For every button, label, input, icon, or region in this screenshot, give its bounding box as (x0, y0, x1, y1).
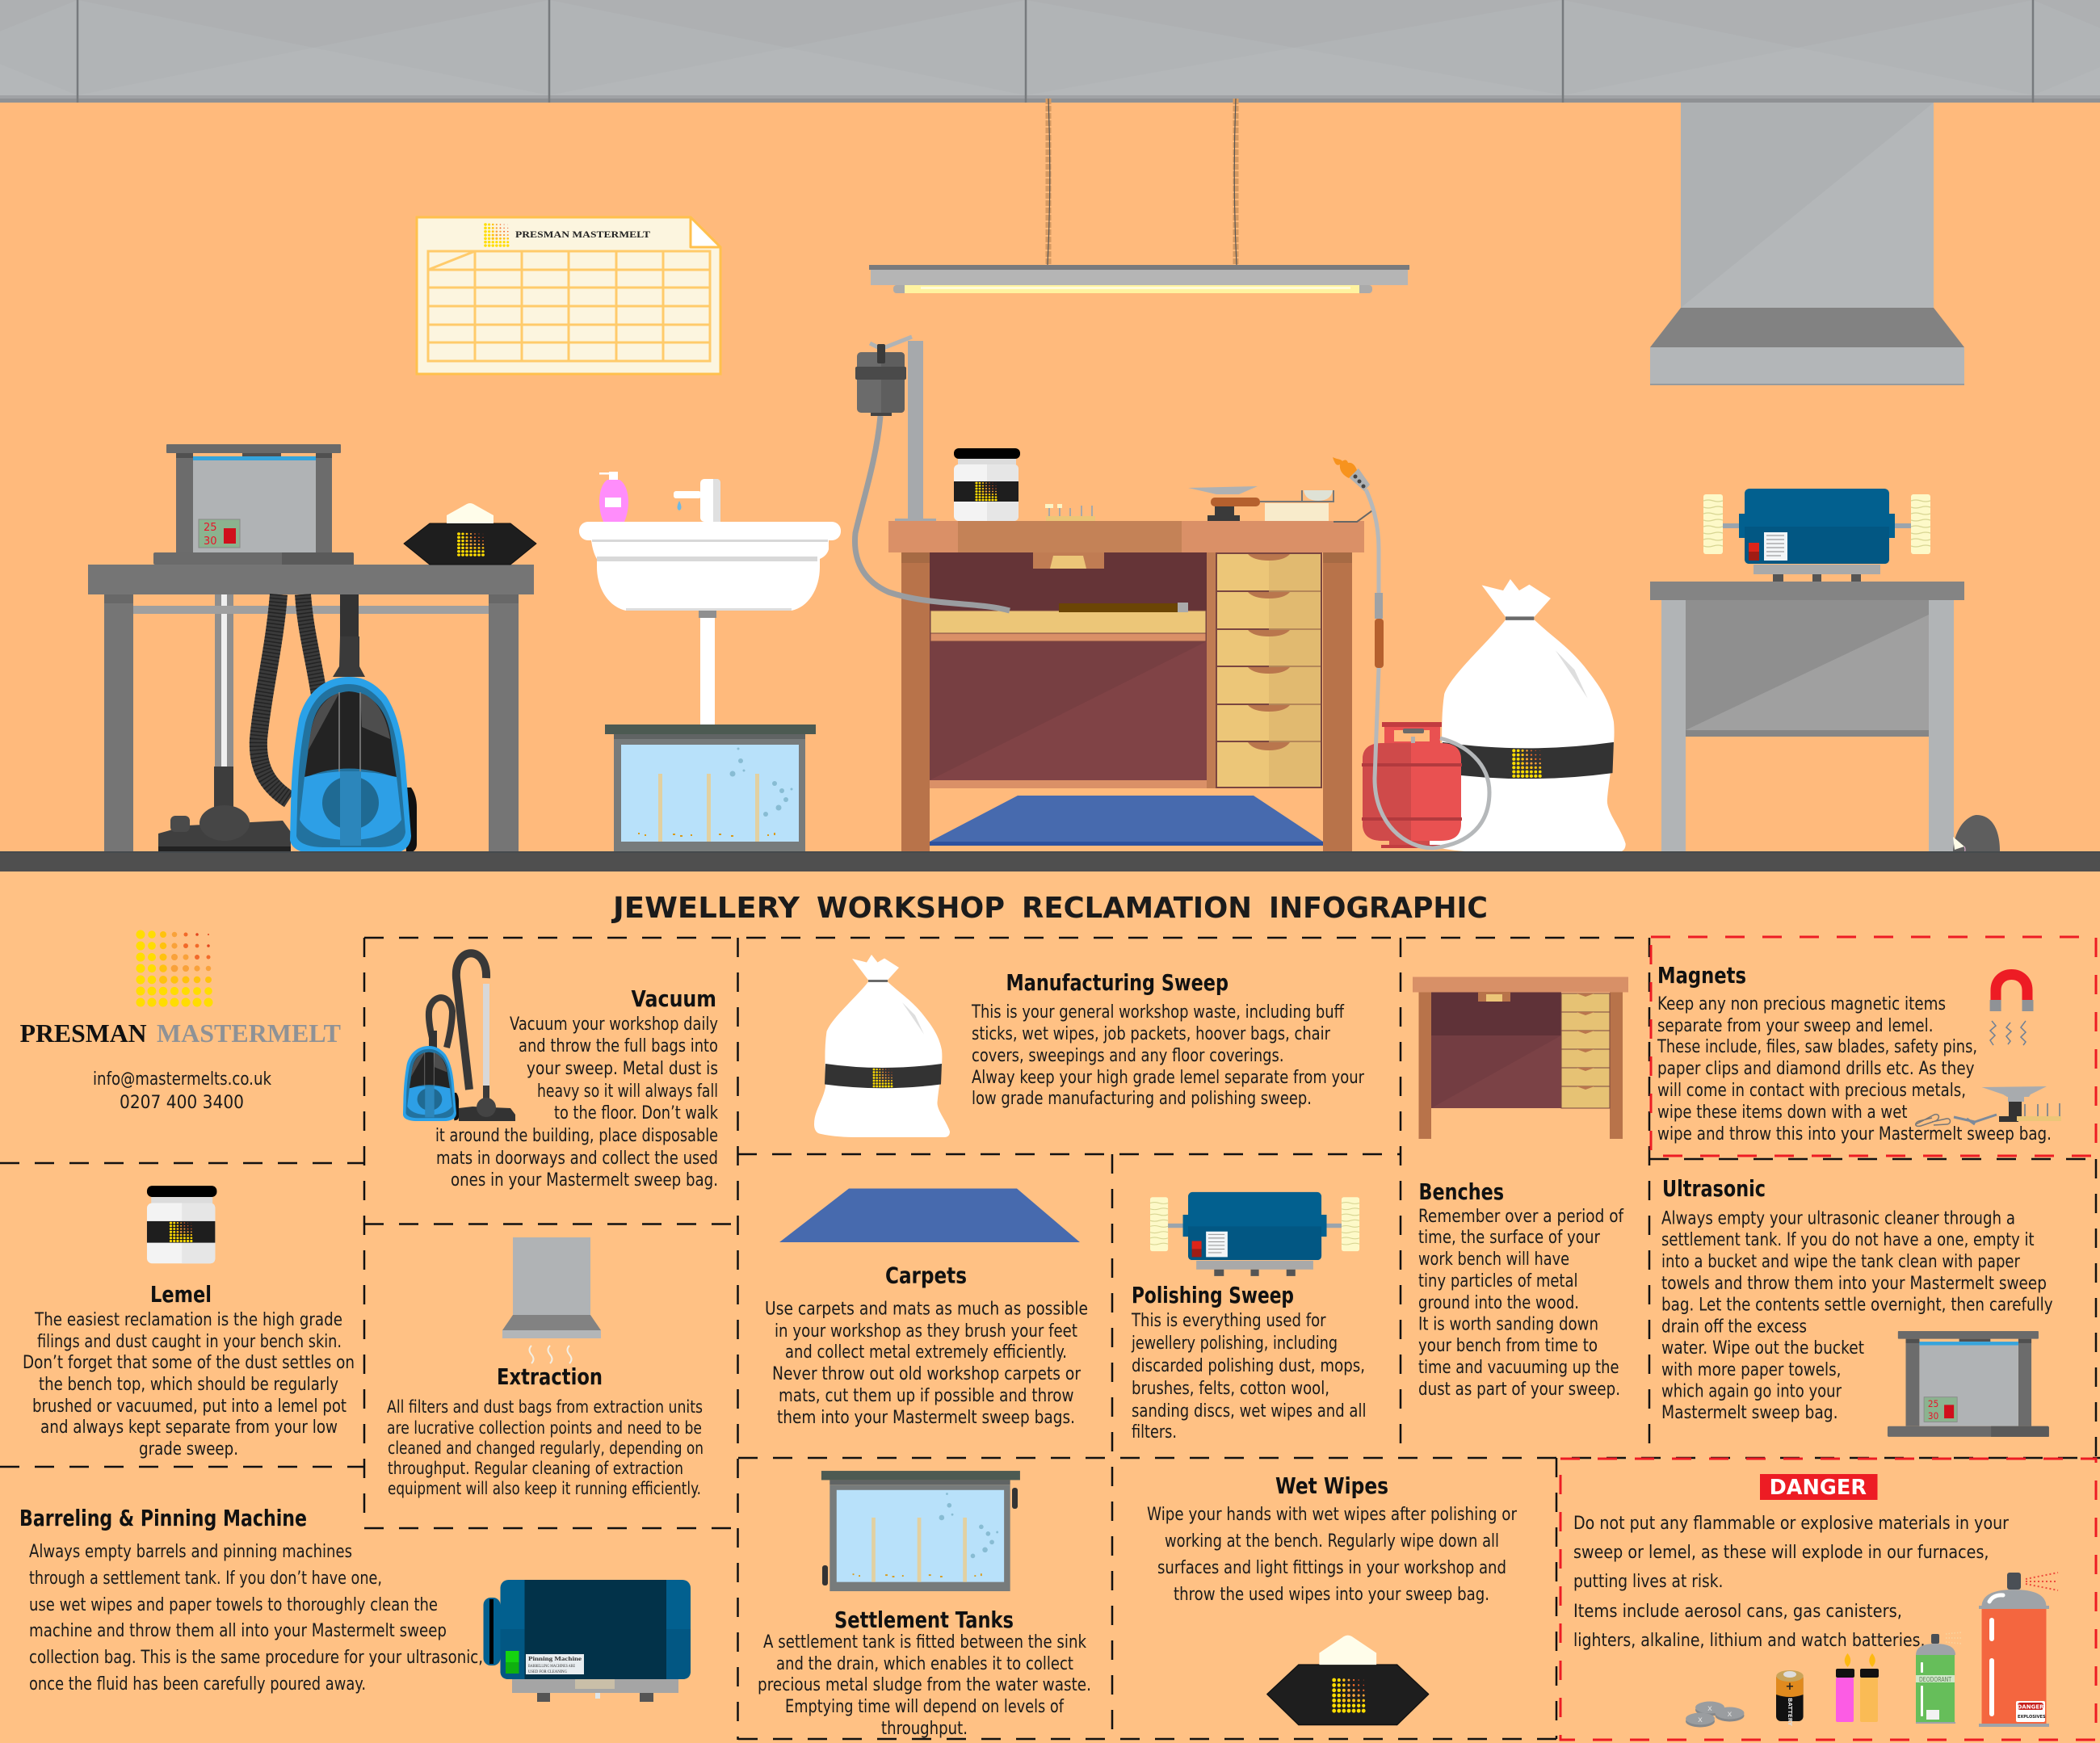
icon: pinning machine: Pinning Machine (528, 1656, 582, 1662)
heading: Lemel (150, 1281, 212, 1308)
body text: dust as part of your sweep. (1418, 1380, 1620, 1400)
body text: to the floor. Don’t walk (554, 1103, 718, 1124)
body text: Always empty your ultrasonic cleaner through a (1661, 1208, 2015, 1229)
body text: paper clips and diamond drills etc. As they (1657, 1059, 1974, 1079)
body text: filings and dust caught in your bench skin. (37, 1332, 342, 1352)
burr stand (1045, 504, 1095, 521)
body text (765, 1300, 1088, 1428)
body text: cleaned and changed regularly, depending on (388, 1438, 704, 1458)
body text: Remember over a period of (1418, 1207, 1624, 1227)
body text: grade sweep. (139, 1439, 238, 1460)
body text: throughput. (881, 1719, 968, 1739)
icon: pinning machine (483, 1580, 691, 1702)
body text (1573, 1514, 2010, 1651)
heading: Extraction (497, 1363, 603, 1390)
panel: barreling and pinning machine (19, 1505, 691, 1702)
body text: sanding discs, wet wipes and all (1132, 1401, 1367, 1422)
body text (1418, 1207, 1624, 1400)
body text: Keep any non precious magnetic items (1657, 994, 1946, 1014)
icon: ultrasonic cleaner (1888, 1331, 2049, 1437)
body text (971, 1002, 1365, 1109)
body text: your bench from time to (1418, 1336, 1598, 1356)
body text: which again go into your (1661, 1381, 1842, 1402)
heading: Wet Wipes (1275, 1472, 1388, 1499)
body text: ground into the wood. (1418, 1293, 1579, 1313)
panel: extraction (387, 1237, 704, 1498)
body text: heavy so it will always fall (537, 1082, 718, 1102)
icon: aerosol can: EXPLOSIVES (2018, 1715, 2046, 1720)
body text: sweep or lemel, as these will explode in our furnaces, (1573, 1543, 1989, 1563)
panel: ultrasonic (1661, 1175, 2053, 1437)
body text: Emptying time will depend on levels of (785, 1697, 1065, 1717)
body text: equipment will also keep it running efficiently. (388, 1479, 701, 1498)
body text: collection bag. This is the same procedure for your ultrasonic, (29, 1648, 483, 1668)
body text (1657, 994, 2052, 1144)
body text: water. Wipe out the bucket (1661, 1338, 1864, 1359)
body text: once the fluid has been carefully poured away. (29, 1674, 366, 1695)
ultrasonic table with vacuum cleaner (88, 444, 536, 857)
body text: All filters and dust bags from extraction units (387, 1397, 703, 1417)
icon: watch batteries (1686, 1701, 1745, 1727)
heading: Benches (1418, 1178, 1504, 1205)
icon: magnetic items (1916, 1086, 2061, 1126)
heading: Settlement Tanks (834, 1606, 1014, 1633)
panel: manufacturing sweep (814, 955, 1365, 1137)
icon: wet wipes box (1267, 1636, 1429, 1725)
body text: Use carpets and mats as much as possible (765, 1300, 1088, 1320)
icon: lighters (1836, 1653, 1879, 1722)
body text: It is worth sanding down (1418, 1315, 1598, 1334)
body text: tiny particles of metal (1418, 1271, 1578, 1292)
danger badge: DANGER (1770, 1476, 1867, 1500)
icon: logo dots (136, 930, 213, 1006)
body text (758, 1632, 1091, 1739)
panel: polishing sweep (1131, 1192, 1367, 1443)
extraction hood (1650, 103, 1964, 385)
body text (23, 1310, 355, 1460)
body text: Wipe your hands with wet wipes after polishing or (1147, 1505, 1518, 1525)
icon: aerosol can: DANGER (2017, 1704, 2044, 1711)
body text: sticks, wet wipes, job packets, hoover bags, chair (972, 1024, 1331, 1044)
icon: extraction hood (502, 1237, 601, 1363)
body text: in your workshop as they brush your feet (775, 1321, 1077, 1342)
body text: Items include aerosol cans, gas canisters, (1573, 1602, 1902, 1622)
icon: aerosol can (1979, 1573, 2058, 1727)
body text: ones in your Mastermelt sweep bag. (451, 1170, 718, 1191)
heading: Ultrasonic (1662, 1175, 1766, 1202)
manufacturing sweep bag on floor (1426, 579, 1626, 852)
panel: vacuum (403, 953, 718, 1191)
panel: wet wipes (1147, 1472, 1518, 1725)
body text (1131, 1311, 1367, 1443)
body text: into a bucket and wipe the tank clean with paper (1661, 1252, 2021, 1272)
icon: watch batteries: x (1698, 1716, 1703, 1724)
main title: JEWELLERY (611, 892, 800, 925)
body text: wipe these items down with a wet (1657, 1102, 1908, 1123)
body text (387, 1397, 704, 1498)
panel: danger (1573, 1474, 2058, 1727)
icon: watch batteries: x (1707, 1704, 1712, 1713)
lower information panel background (0, 872, 2100, 1743)
icon: alkaline battery: + (1786, 1681, 1794, 1693)
icon: deodorant can: DEODORANT (1919, 1676, 1951, 1683)
panel: benches (1413, 977, 1628, 1400)
body text: are lucrative collection points and need to be (387, 1418, 702, 1438)
icon: sweep bag (814, 955, 950, 1137)
body text (435, 1014, 718, 1191)
icon: carpet (779, 1189, 1080, 1242)
body text: filters. (1132, 1422, 1177, 1443)
main title: RECLAMATION (1022, 892, 1252, 925)
icon: magnet (1990, 974, 2034, 1045)
main title: INFOGRAPHIC (1269, 892, 1488, 925)
jeweller's bench (888, 521, 1364, 851)
body text: machine and throw them all into your Mastermelt sweep (29, 1621, 447, 1641)
company name: MASTERMELT (157, 1018, 341, 1048)
red danger frame: danger (1560, 1459, 2096, 1740)
icon: alkaline battery: BATTERY (1787, 1698, 1793, 1727)
body text: Don’t forget that some of the dust settles on (23, 1353, 355, 1373)
gas torch with hose (1333, 457, 1489, 848)
panel: magnets (1657, 962, 2061, 1144)
body text: time, the surface of your (1418, 1228, 1601, 1248)
body text: time and vacuuming up the (1418, 1358, 1619, 1378)
body text: it around the building, place disposable (435, 1126, 718, 1146)
icon: bench (1413, 977, 1628, 1139)
heading: Polishing Sweep (1132, 1282, 1294, 1308)
lemel jar on bench (954, 448, 1020, 521)
icon: pinning machine: USED FOR CLEANING (528, 1670, 567, 1674)
body text: throughput. Regular cleaning of extraction (388, 1459, 683, 1478)
red danger frame: magnets (1651, 937, 2096, 1156)
contact details (93, 1069, 271, 1113)
panel: settlement tanks (758, 1471, 1091, 1739)
hanging strip light (869, 99, 1409, 293)
body text (1147, 1505, 1518, 1605)
body text: working at the bench. Regularly wipe down all (1165, 1531, 1499, 1552)
wall calendar (417, 217, 720, 374)
ceiling (0, 0, 2100, 103)
body text: and collect metal extremely efficiently. (785, 1342, 1067, 1363)
body text: covers, sweepings and any floor coverings. (972, 1046, 1284, 1066)
body text: The easiest reclamation is the high grade (34, 1310, 342, 1330)
body text: Alway keep your high grade lemel separate from your (972, 1068, 1365, 1088)
heading: Magnets (1657, 962, 1746, 989)
panel: lemel (23, 1186, 355, 1460)
body text: These include, files, saw blades, safety pins, (1657, 1037, 1977, 1057)
body text: use wet wipes and paper towels to thoroughly clean the (29, 1595, 438, 1615)
body text: brushes, felts, cotton wool, (1132, 1379, 1329, 1399)
body text: and the drain, which enables it to collect (776, 1654, 1073, 1674)
body text: jewellery polishing, including (1131, 1334, 1338, 1354)
body text: lighters, alkaline, lithium and watch batteries. (1573, 1631, 1926, 1651)
body text: and throw the full bags into (519, 1036, 718, 1056)
body text (1661, 1208, 2053, 1423)
body text: A settlement tank is fitted between the sink (763, 1632, 1086, 1653)
main title: WORKSHOP (817, 892, 1005, 925)
workshop background wall (0, 0, 2100, 872)
icon: watch batteries: x (1728, 1710, 1732, 1719)
icon: alkaline battery (1776, 1670, 1804, 1727)
contact details: 0207 400 3400 (120, 1093, 244, 1113)
icon: pinning machine: BARRELLING MACHINES ARE (528, 1665, 575, 1669)
heading: Vacuum (632, 985, 716, 1012)
body text: brushed or vacuumed, put into a lemel pot (32, 1396, 346, 1417)
icon: lemel jar (147, 1186, 216, 1263)
body text: precious metal sludge from the water waste. (758, 1675, 1091, 1695)
polishing machine on steel table (1650, 489, 1964, 851)
body text: drain off the excess (1661, 1317, 1807, 1338)
pendant motor with flex shaft (855, 337, 1010, 611)
body text: mats in doorways and collect the used (436, 1149, 718, 1169)
body text: them into your Mastermelt sweep bags. (777, 1408, 1075, 1428)
body text (29, 1542, 483, 1695)
workshop floor (0, 851, 2100, 872)
wall calendar: PRESMAN MASTERMELT (515, 229, 650, 240)
heading: Manufacturing Sweep (1006, 969, 1228, 996)
gas canister (1362, 722, 1462, 848)
body text: the bench top, which should be regularly (39, 1375, 338, 1395)
body text: separate from your sweep and lemel. (1657, 1016, 1934, 1036)
body text: Never throw out old workshop carpets or (772, 1364, 1082, 1384)
panel: company logo and contact (20, 930, 341, 1113)
panel: carpets (765, 1189, 1088, 1428)
body text: and always kept separate from your low (40, 1418, 338, 1438)
heading: Barreling & Pinning Machine (19, 1505, 307, 1531)
body text: through a settlement tank. If you don’t have one, (29, 1569, 382, 1589)
sink with tap and soap (579, 472, 841, 724)
body text: low grade manufacturing and polishing sweep. (972, 1089, 1312, 1109)
anvil and soldering block (1188, 486, 1334, 521)
body text: mats, cut them up if possible and throw (779, 1386, 1074, 1406)
body text: surfaces and light fittings in your workshop and (1157, 1558, 1506, 1578)
icon: settlement tank (821, 1471, 1020, 1591)
body text: work bench will have (1418, 1250, 1569, 1270)
contact details: info@mastermelts.co.uk (93, 1069, 271, 1090)
settlement tank under sink (605, 724, 816, 851)
body text: This is your general workshop waste, including buff (971, 1002, 1345, 1023)
body text: throw the used wipes into your sweep bag. (1174, 1585, 1489, 1605)
mouse (1953, 815, 2000, 859)
icon: polishing machine (1150, 1192, 1359, 1276)
body text: Vacuum your workshop daily (510, 1014, 718, 1035)
body text: This is everything used for (1131, 1311, 1326, 1331)
icon: vacuum cleaner (403, 953, 515, 1121)
body text: will come in contact with precious metals, (1657, 1081, 1966, 1101)
body text: Mastermelt sweep bag. (1661, 1403, 1838, 1423)
body text: putting lives at risk. (1573, 1572, 1724, 1592)
body text: your sweep. Metal dust is (527, 1059, 718, 1079)
body text: with more paper towels, (1661, 1360, 1842, 1380)
company name: PRESMAN (20, 1018, 147, 1048)
body text: Always empty barrels and pinning machines (29, 1542, 352, 1562)
heading: Carpets (885, 1262, 967, 1289)
icon: deodorant can (1916, 1632, 1962, 1724)
body text: discarded polishing dust, mops, (1132, 1356, 1365, 1376)
dashed section grid (0, 938, 2100, 1740)
body text: Do not put any flammable or explosive materials in your (1573, 1514, 2010, 1534)
